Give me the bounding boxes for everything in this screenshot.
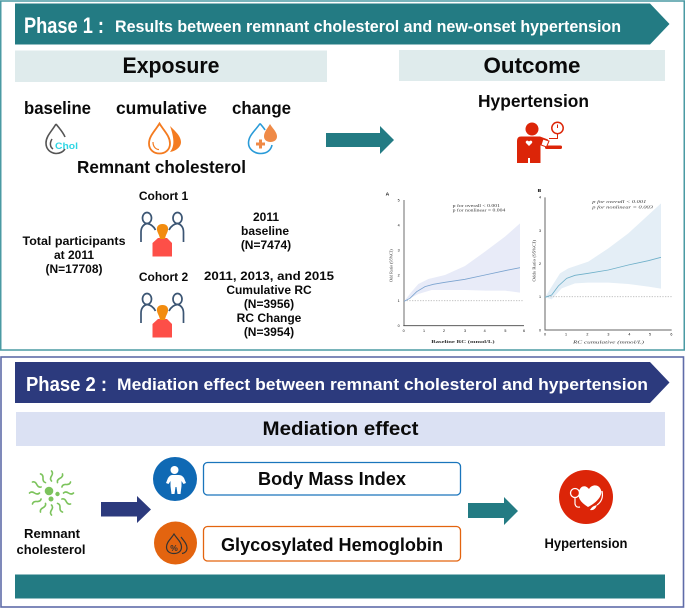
chart B: cumulative RC spline: B: [538, 188, 542, 194]
chart A: baseline RC spline: 3: [398, 249, 400, 253]
icon: hemoglobin circle: [154, 522, 197, 564]
label: remnant cholesterol: Remnant cholesterol: [77, 157, 246, 177]
label: total participants: at 2011: [54, 248, 94, 262]
chart A: baseline RC spline: 5: [504, 329, 506, 333]
chart A: baseline RC spline: 6: [523, 329, 525, 333]
label: remnant cholesterol source: Remnant: [24, 527, 81, 541]
icon: baseline cholesterol drop: Chol: [55, 141, 78, 152]
exposure heading: Exposure: [122, 53, 220, 78]
label: change: change: [232, 98, 291, 118]
chart B: cumulative RC spline: [531, 188, 672, 345]
label: total participants: Total participants: [22, 234, 126, 248]
label: total participants: [22, 234, 126, 276]
icon: hemoglobin circle: %: [170, 543, 178, 553]
label: cohort 2 details: (N=3956): [244, 297, 294, 311]
chart B: cumulative RC spline: RC cumulative (mmol/L): [571, 340, 645, 345]
label: cohort 2 details: (N=3954): [244, 325, 294, 339]
label: cohort 1 details: (N=7474): [241, 238, 291, 252]
chart B: cumulative RC spline: 1: [539, 295, 541, 299]
chart B: cumulative RC spline: 4: [539, 196, 541, 200]
exposure heading: [15, 50, 327, 82]
outcome heading: [399, 50, 665, 81]
label: cohort 2 details: [204, 269, 334, 339]
chart B: cumulative RC spline: 5: [649, 333, 651, 337]
box: body mass index: [204, 462, 460, 495]
chart B: cumulative RC spline: p for overall < 0.001: [591, 199, 646, 204]
phase 1 banner: Phase 1 :: [24, 13, 104, 38]
chart A: baseline RC spline: 4: [484, 329, 486, 333]
footer bar: [15, 574, 665, 598]
label: total participants: (N=17708): [45, 262, 103, 276]
label: cohort 1: Cohort 1: [139, 189, 188, 203]
icon: hypertension heart circle: [559, 470, 613, 524]
chart B: cumulative RC spline: 0: [539, 328, 541, 332]
icon: body mass circle: [153, 457, 197, 501]
label: cohort 2: Cohort 2: [139, 270, 188, 284]
chart B: cumulative RC spline: Odds Ratio (95%CI): [531, 239, 536, 282]
panel: phase 2 frame: [1, 357, 684, 607]
mediation effect heading: Mediation effect: [262, 418, 419, 440]
chart B: cumulative RC spline: 3: [539, 229, 541, 233]
mediation effect heading: [16, 412, 665, 446]
chart B: cumulative RC spline: 1: [565, 333, 567, 337]
chart A: baseline RC spline: p for overall < 0.001: [453, 204, 500, 208]
chart A: baseline RC spline: 5: [398, 198, 400, 202]
phase 2 banner: [15, 362, 670, 403]
label: cohort 1 details: 2011: [253, 210, 279, 224]
outcome heading: Outcome: [484, 53, 580, 78]
arrow: exposure to outcome: [326, 126, 394, 154]
chart A: baseline RC spline: 3: [464, 329, 466, 333]
box: glycosylated hemoglobin: [204, 526, 460, 561]
chart B: cumulative RC spline: 6: [670, 333, 672, 337]
icon: change drops: [248, 124, 277, 154]
label: baseline: baseline: [24, 98, 91, 118]
chart A: baseline RC spline: [386, 191, 525, 344]
chart A: baseline RC spline: 2: [398, 274, 400, 278]
chart A: baseline RC spline: 4: [398, 224, 400, 228]
label: cohort 1 details: baseline: [241, 224, 289, 238]
label: remnant cholesterol source: cholesterol: [16, 543, 86, 557]
chart A: baseline RC spline: A: [386, 191, 390, 197]
arrow: cholesterol to mediators: [101, 496, 151, 523]
arrow: mediators to hypertension: [468, 497, 518, 525]
label: hypertension result: Hypertension: [544, 536, 628, 551]
chart B: cumulative RC spline: 0: [544, 333, 546, 337]
chart A: baseline RC spline: Odd Ratio (95%CI): [388, 249, 393, 282]
chart A: baseline RC spline: Baseline RC (mmol/L): [431, 339, 496, 344]
phase 1 banner: [15, 4, 670, 44]
box: body mass index: Body Mass Index: [258, 469, 406, 489]
icon: remnant cholesterol particle: [30, 471, 74, 515]
box: glycosylated hemoglobin: Glycosylated Hemoglobin: [221, 535, 443, 555]
label: cohort 2 details: Cumulative RC: [226, 283, 312, 297]
icon: person with blood pressure cuff: [517, 122, 563, 163]
icon: cohort 1 people: [141, 212, 184, 256]
phase 2 banner: Mediation effect between remnant cholesterol and hypertension: [117, 376, 648, 394]
label: hypertension outcome: Hypertension: [478, 91, 589, 111]
panel: phase 1 frame: [1, 1, 684, 350]
icon: cumulative drops: [149, 124, 181, 154]
label: cohort 1 details: [241, 210, 291, 252]
label: cohort 2 details: 2011, 2013, and 2015: [204, 269, 334, 283]
label: cohort 2 details: RC Change: [237, 311, 302, 325]
chart B: cumulative RC spline: p for nonlinear = 0.003: [591, 205, 654, 210]
chart A: baseline RC spline: 0: [403, 329, 405, 333]
phase 1 banner: Results between remnant cholesterol and new-onset hypertension: [115, 18, 621, 36]
chart B: cumulative RC spline: 3: [607, 333, 609, 337]
label: cumulative: cumulative: [116, 98, 207, 118]
chart B: cumulative RC spline: 4: [628, 333, 630, 337]
chart A: baseline RC spline: 1: [398, 299, 400, 303]
chart B: cumulative RC spline: 2: [586, 333, 588, 337]
chart A: baseline RC spline: 1: [423, 329, 425, 333]
phase 2 banner: Phase 2 :: [26, 373, 107, 396]
chart A: baseline RC spline: p for nonlinear = 0.004: [453, 208, 506, 212]
icon: baseline cholesterol drop: [46, 124, 78, 154]
icon: cohort 2 people: [141, 294, 184, 338]
chart A: baseline RC spline: 0: [398, 324, 400, 328]
chart A: baseline RC spline: 2: [443, 329, 445, 333]
chart B: cumulative RC spline: 2: [539, 262, 541, 266]
label: remnant cholesterol source: [16, 527, 86, 557]
